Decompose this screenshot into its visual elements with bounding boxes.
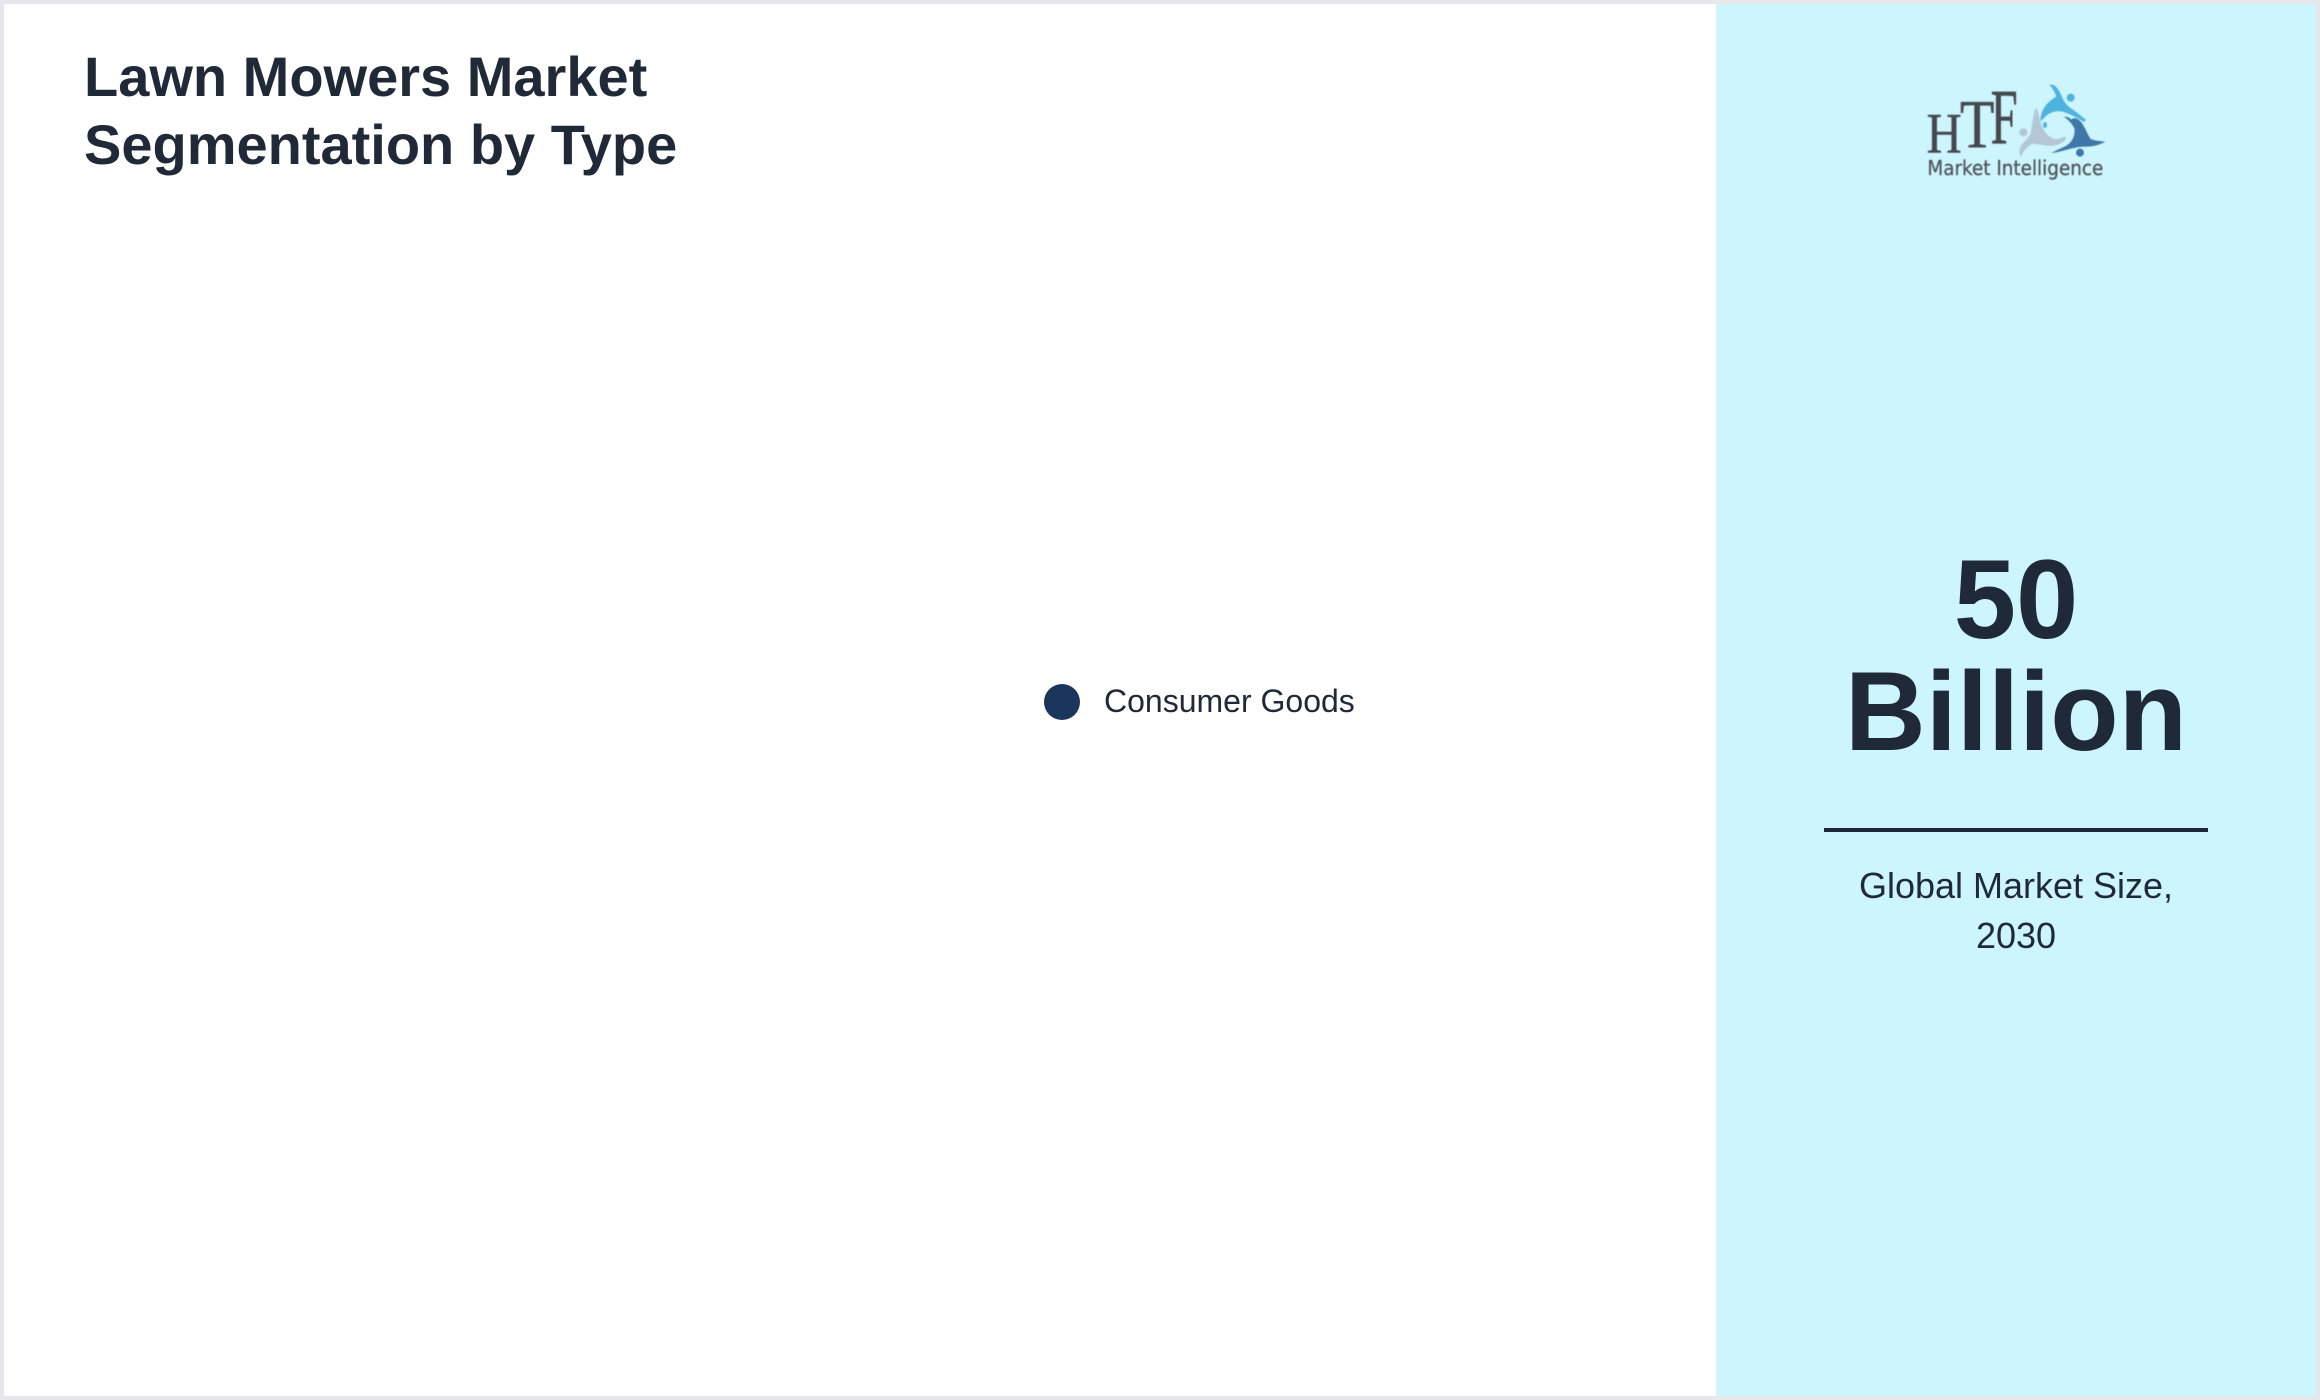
panel: market size sidebar xyxy=(1716,4,2316,1396)
legend marker xyxy=(1044,684,1080,720)
icon: HTF Market Intelligence logo xyxy=(1927,75,2106,180)
caption: Global Market Size, xyxy=(1859,865,2173,906)
logo figure: dark blue xyxy=(2051,116,2105,157)
divider rule xyxy=(1824,828,2208,832)
logo wordmark HTF: T xyxy=(1960,86,1994,163)
title xyxy=(84,45,677,176)
title: Segmentation by Type xyxy=(84,113,677,176)
logo figure: light blue xyxy=(2041,84,2086,128)
logo figure: grey blue xyxy=(2019,108,2066,157)
logo wordmark HTF: F xyxy=(1991,75,2018,161)
title: Lawn Mowers Market xyxy=(84,45,647,108)
logo figures xyxy=(2019,84,2105,157)
big number: Billion xyxy=(1845,649,2187,774)
legend label: Consumer Goods xyxy=(1104,683,1355,719)
caption xyxy=(1859,865,2173,956)
legend: consumer goods xyxy=(1044,683,1355,720)
logo wordmark HTF xyxy=(1927,75,2018,166)
caption: 2030 xyxy=(1976,915,2056,956)
logo tagline: Market Intelligence xyxy=(1927,156,2103,180)
big number: 50 xyxy=(1954,537,2078,662)
logo wordmark HTF: H xyxy=(1927,103,1962,166)
big number xyxy=(1845,537,2187,774)
